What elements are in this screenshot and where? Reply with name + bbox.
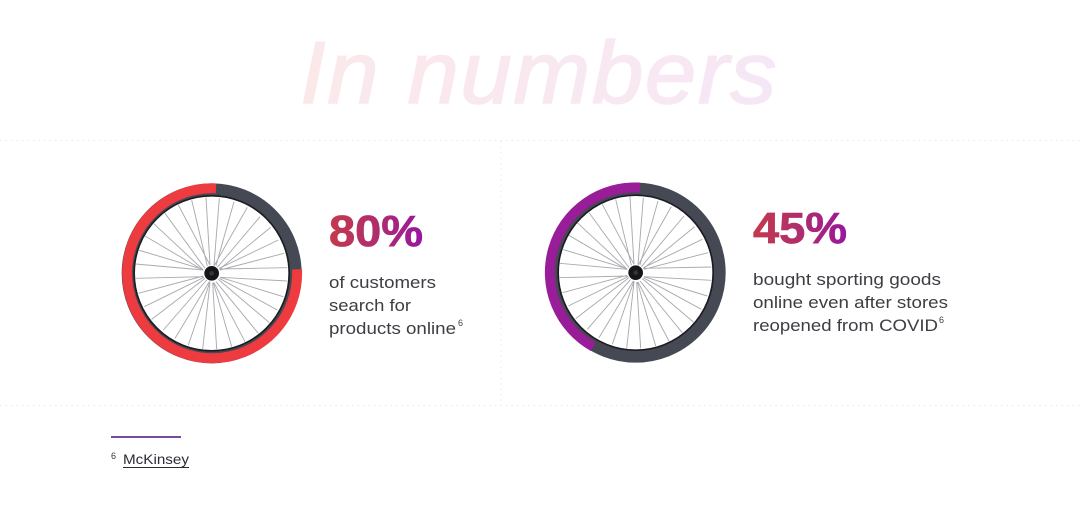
text: 80% description: search for: [329, 296, 411, 315]
text: 80% description: 6: [458, 318, 463, 328]
text: 45% description: online even after stores: [753, 293, 948, 312]
text: 80% description: of customers: [329, 273, 436, 292]
icon: bicycle wheel with 80% red tyre: [127, 188, 297, 358]
icon: bicycle wheel with 45% purple tyre: [550, 188, 719, 356]
text: 45% description: bought sporting goods: [753, 270, 941, 289]
footnote: 6: [111, 451, 116, 461]
number: 45%: 45%: [753, 204, 847, 253]
footnote: [111, 436, 189, 468]
text: 80% description: products online: [329, 319, 456, 338]
panel: 80% stat: [127, 188, 463, 358]
title: In numbers: [300, 23, 778, 122]
text: 45% description: 6: [939, 315, 944, 325]
footnote: McKinsey: [123, 451, 189, 467]
text: 80% description: [329, 273, 463, 338]
text: 45% description: reopened from COVID: [753, 316, 938, 335]
text: 45% description: [753, 270, 948, 335]
panel: 45% stat: [550, 188, 948, 356]
number: 80%: 80%: [329, 207, 423, 256]
